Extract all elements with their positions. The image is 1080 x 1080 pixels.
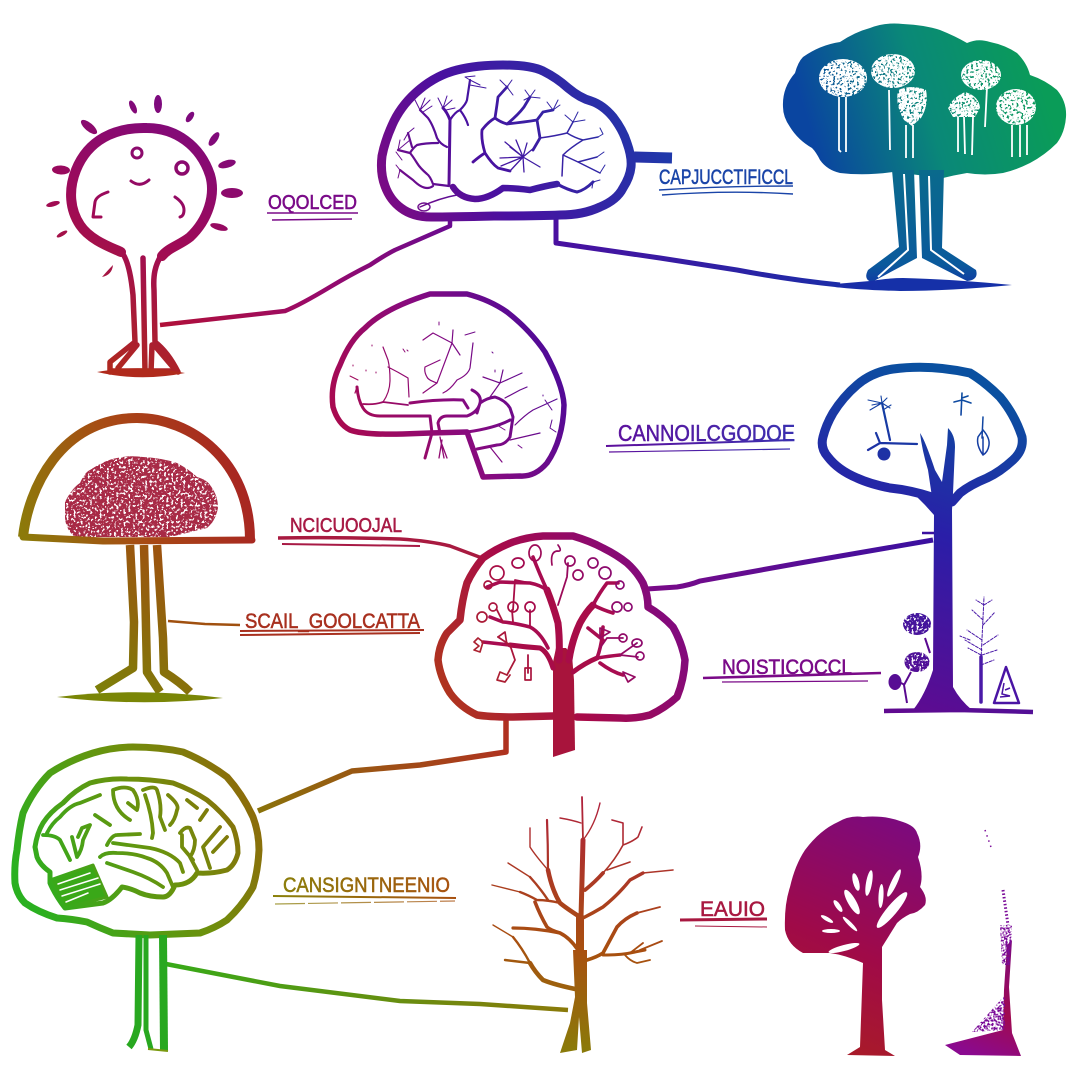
crown and trunk bbox=[785, 817, 926, 1056]
connector: sun tree to brain bbox=[160, 218, 450, 325]
connector: mid tree to right tree bbox=[647, 540, 933, 589]
stub bbox=[922, 532, 934, 534]
speckled edge bbox=[972, 925, 1012, 1032]
label underline bbox=[703, 673, 881, 678]
label second underline bbox=[282, 544, 420, 546]
label: center low right bbox=[703, 656, 881, 682]
inner sprout, fruit and leaf bbox=[868, 393, 989, 460]
label: dome stem bbox=[240, 610, 424, 635]
cerebellum bbox=[50, 865, 107, 908]
main limbs bbox=[547, 590, 593, 660]
trunk bbox=[553, 648, 575, 757]
label underline bbox=[606, 440, 793, 446]
connector: green brain to bare tree bbox=[166, 964, 568, 1010]
bubble outline bbox=[822, 367, 1022, 502]
tree: faded sliver silhouette bbox=[945, 830, 1021, 1056]
stem strips bbox=[129, 935, 139, 1047]
label text: NOISTICOCCL bbox=[722, 656, 852, 679]
folds bbox=[43, 788, 227, 887]
connector: label to mid tree bbox=[278, 538, 482, 558]
white gaps between limbs bbox=[820, 868, 911, 955]
left limbs bbox=[548, 870, 580, 917]
label underline bbox=[240, 630, 424, 635]
ground bbox=[97, 368, 185, 377]
ground line bbox=[884, 710, 1033, 712]
label second underline bbox=[609, 449, 790, 452]
trunk strokes bbox=[110, 250, 178, 372]
outer outline bbox=[15, 747, 259, 935]
label underline bbox=[267, 213, 358, 220]
ground bbox=[57, 692, 223, 702]
brain outline bbox=[381, 65, 631, 217]
leaf bbox=[418, 203, 430, 211]
main stem bbox=[576, 917, 584, 957]
ground bbox=[835, 278, 1012, 291]
label second underline bbox=[722, 681, 868, 682]
right limbs bbox=[583, 873, 643, 918]
label: bottom center-right bbox=[680, 898, 767, 927]
label underline bbox=[273, 896, 456, 898]
tree: dome canopy with mossy crown bbox=[23, 418, 252, 702]
crown blob bbox=[65, 456, 218, 537]
label underline bbox=[680, 919, 767, 920]
connector: mid tree to green brain bbox=[258, 717, 506, 811]
tree: dark filled silhouette bbox=[785, 817, 926, 1056]
main vessels bbox=[357, 387, 513, 458]
small tree crowns bbox=[819, 54, 1036, 126]
lower right mini tree bbox=[960, 597, 998, 702]
tree: mid tree with curled leaves bbox=[438, 536, 685, 757]
label text: OQOLCED bbox=[268, 192, 357, 214]
main vein bbox=[453, 184, 557, 199]
trunk and fork bbox=[913, 428, 972, 710]
triangle glyph bbox=[1000, 683, 1010, 697]
label: upper right bbox=[659, 166, 793, 195]
trunk inner lines bbox=[878, 174, 964, 277]
warning triangle bbox=[994, 667, 1019, 703]
starburst bbox=[500, 140, 540, 172]
solid sliver bbox=[945, 940, 1021, 1056]
label: dome top bbox=[282, 515, 420, 546]
brain: fine veins (magenta) bbox=[332, 294, 564, 477]
tree: bare tree bbox=[492, 797, 673, 1053]
label: center right bbox=[606, 420, 795, 452]
canopy outline bbox=[438, 536, 685, 718]
dome base bbox=[23, 537, 252, 541]
tree: sun-headed tree bbox=[46, 95, 243, 377]
root tuft bbox=[439, 437, 447, 458]
brain: branching veins (blue-purple) bbox=[381, 65, 672, 217]
canopy bbox=[783, 24, 1066, 178]
branches bbox=[443, 108, 450, 185]
lower left mini trees bbox=[888, 613, 931, 690]
label: bottom center-left bbox=[273, 874, 456, 904]
connector: brain to cloud tree bbox=[556, 218, 840, 285]
label text: NCICUOOJAL bbox=[290, 515, 402, 537]
label text: SCAIL_GOOLCATTA bbox=[245, 610, 420, 633]
scattered dots bbox=[350, 322, 556, 448]
small tree stems bbox=[839, 87, 1027, 158]
thin branches bbox=[355, 330, 557, 462]
face marks bbox=[132, 148, 142, 158]
brain outline bbox=[332, 294, 564, 477]
top dots bbox=[985, 830, 992, 850]
label underline bbox=[659, 186, 793, 195]
label text: CANNOILCGODOE bbox=[618, 420, 795, 446]
stem: green brain tree bbox=[129, 935, 168, 1051]
trunk legs bbox=[866, 170, 977, 282]
connector: dome stem to label bbox=[168, 621, 240, 625]
label text: CAPJUCCTIFICCL bbox=[659, 166, 793, 189]
head outline bbox=[71, 128, 212, 256]
tree: right tree with bubble bbox=[822, 367, 1033, 712]
label second underline bbox=[275, 901, 455, 904]
tree: cloud canopy with small trees bbox=[783, 24, 1066, 291]
curled leaves bbox=[474, 545, 644, 682]
label: upper left bbox=[267, 192, 358, 220]
stem strokes bbox=[97, 545, 190, 692]
label text: CANSIGNTNEENIO bbox=[283, 874, 450, 897]
dotted upper edge bbox=[1003, 890, 1008, 925]
rays bbox=[46, 95, 243, 277]
label text: EAUIO bbox=[700, 898, 765, 921]
trunk bbox=[560, 950, 591, 1053]
stub to right bbox=[634, 157, 672, 158]
brain outline bbox=[35, 779, 238, 908]
dome outline bbox=[23, 418, 250, 540]
label second underline bbox=[695, 926, 767, 927]
fine twigs bbox=[396, 76, 605, 188]
brain: green anatomical brain on tree bbox=[15, 747, 259, 935]
